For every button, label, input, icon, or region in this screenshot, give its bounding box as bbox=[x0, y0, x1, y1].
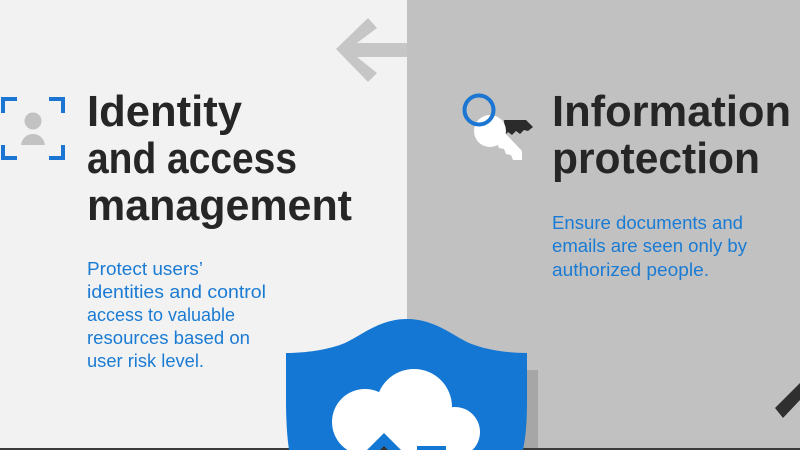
shield shadow bbox=[520, 370, 538, 450]
icon: shield with cloud bbox=[286, 319, 527, 450]
text: identity description: resources based on bbox=[87, 327, 250, 348]
icon: identity scan bbox=[3, 99, 63, 158]
panel: identity background bbox=[0, 0, 407, 450]
text: identity description bbox=[87, 258, 266, 371]
icon: diagonal bar bbox=[775, 383, 800, 418]
text: identity description: Protect users’ bbox=[87, 258, 203, 279]
text: information protection description: emails are seen only by bbox=[552, 235, 748, 256]
heading: identity and access management: and access bbox=[87, 134, 297, 183]
heading: information protection: protection bbox=[552, 134, 760, 183]
heading: information protection bbox=[552, 87, 791, 183]
heading: information protection: Information bbox=[552, 87, 791, 136]
heading: identity and access management: management bbox=[87, 181, 352, 230]
text: information protection description: Ensure documents and bbox=[552, 212, 743, 233]
heading: identity and access management: Identity bbox=[87, 87, 243, 136]
text: identity description: access to valuable bbox=[87, 304, 235, 325]
bottom edge line bbox=[0, 448, 800, 450]
text: information protection description: authorized people. bbox=[552, 259, 709, 280]
text: identity description: user risk level. bbox=[87, 350, 204, 371]
text: information protection description bbox=[552, 212, 748, 280]
arrow: pointing left bbox=[336, 18, 407, 82]
icon: keys bbox=[464, 96, 533, 160]
heading: identity and access management bbox=[87, 87, 352, 230]
panel: information protection background bbox=[407, 0, 800, 450]
text: identity description: identities and control bbox=[87, 281, 266, 302]
